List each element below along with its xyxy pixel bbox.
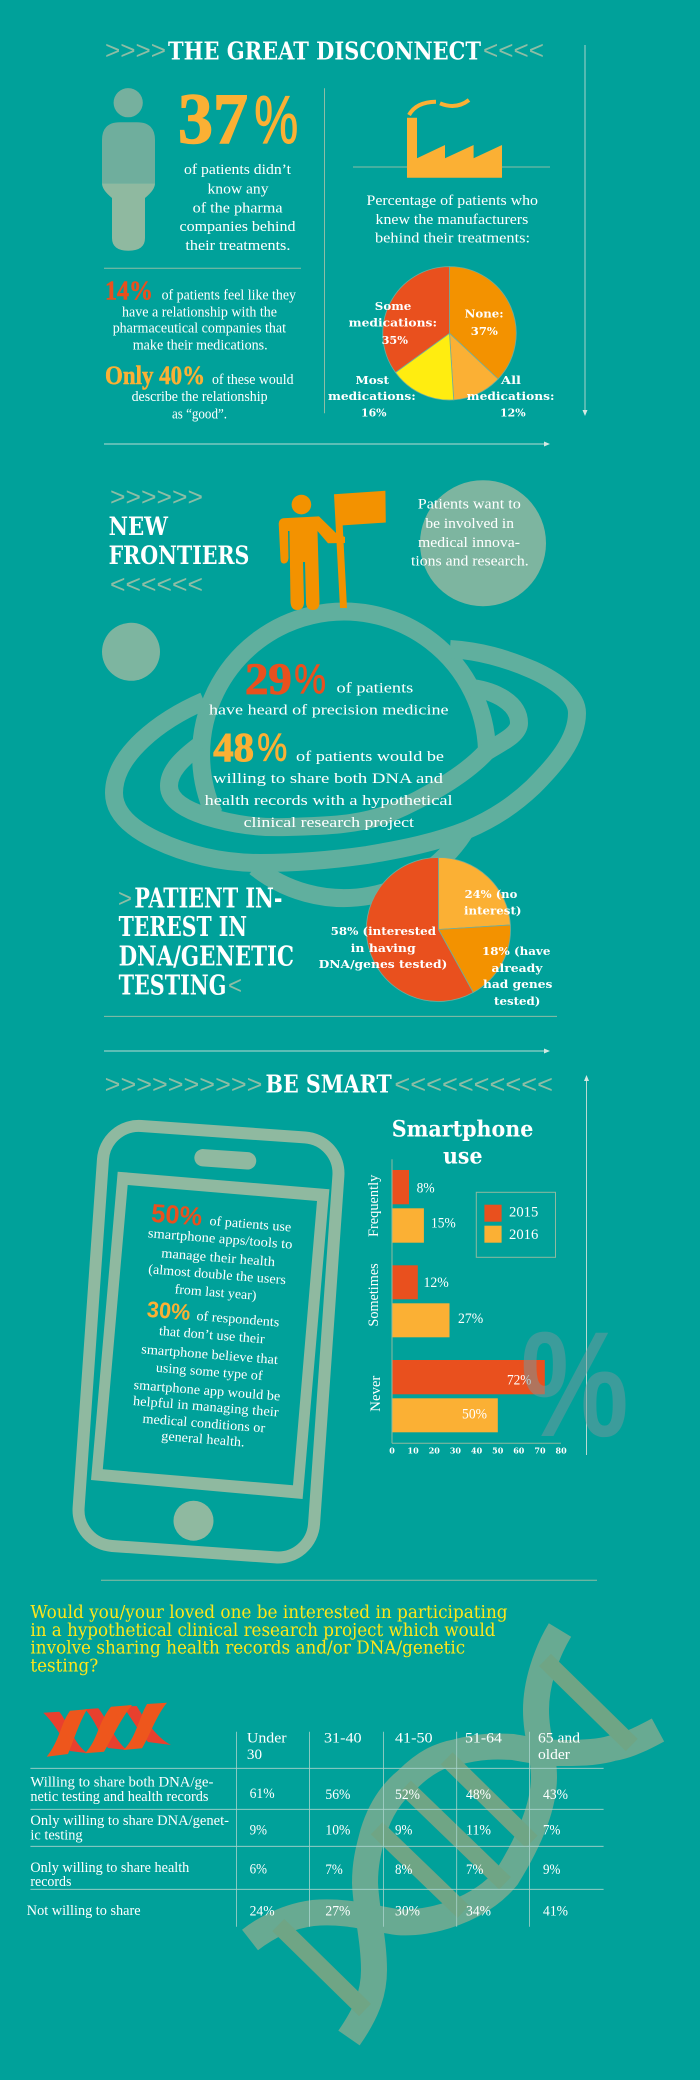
bar chart: smartphone use: 8% [417,1181,435,1197]
heading: patient interest: TESTING [119,970,226,1001]
icon: smartphone [76,1123,341,1560]
icon: small moon [102,623,160,681]
pie labels: 35% [382,333,408,347]
pie labels: DNA/genes tested) [319,957,447,971]
data table: Not willing to share [27,1903,141,1919]
text: phone screen stats: general health. [161,1428,245,1450]
question heading: testing? [30,1657,98,1677]
pie labels: medications: [467,389,554,403]
data table: 43% [543,1787,568,1803]
title: the great disconnect: THE GREAT DISCONNECT [168,36,481,65]
heading: new frontiers: <<<<<< [110,569,203,599]
heading: new frontiers [109,482,249,599]
text: phone screen stats: from last year) [174,1281,257,1303]
heading: new frontiers: FRONTIERS [109,541,249,570]
text: phone screen stats [132,1198,293,1450]
heading: new frontiers: >>>>>> [110,482,203,512]
chart title [392,1117,533,1170]
icon: red dna logo [43,1703,171,1757]
pie labels: 37% [471,324,498,338]
data table: 9% [250,1823,267,1839]
text: 37% description [180,162,296,254]
text: phone screen stats: smartphone app would be [133,1377,281,1404]
text: callout: be involved in [425,516,515,532]
heading: new frontiers: NEW [109,512,169,541]
stat text: 14%: pharmaceutical companies that [113,321,287,337]
text: 37% description: of the pharma [193,200,283,216]
data table: 9% [543,1862,560,1878]
text: phone screen stats: (almost double the users [148,1261,287,1287]
text: 37% description: companies behind [180,219,296,235]
stat text: only 40%: of these would [212,372,294,388]
pie labels: medications: [349,316,437,330]
stat text: only 40% [105,361,294,422]
arrow: horizontal right [104,442,550,446]
heading: patient interest: TEREST IN [119,912,247,943]
text: pie heading: behind their treatments: [375,231,530,247]
panel: clinical research table [27,1580,658,2038]
data table: 7% [466,1862,483,1878]
bar chart: smartphone use: 27% [458,1311,483,1327]
text: phone screen stats: of patients use [209,1213,292,1234]
data table: 7% [543,1823,560,1839]
bar chart: smartphone use: 50% [462,1407,487,1423]
stat text: only 40%: Only 40% [105,361,205,390]
stat text: 48%: % [257,727,287,770]
bar chart: smartphone use: 30 [450,1446,461,1456]
data table: older [538,1747,570,1763]
legend: 2015 [509,1205,538,1221]
icon: ringed planet [114,612,577,898]
text: phone screen stats: that don’t use their [158,1323,266,1346]
chart title: use [443,1144,482,1170]
bar chart: smartphone use: 60 [513,1446,525,1456]
data table: 30% [395,1904,420,1920]
stat text: 14%: have a relationship with the [122,305,277,321]
data table: Willing to share both DNA/ge- [30,1775,214,1791]
stat text: 14% [105,275,296,353]
pie labels [319,887,552,1008]
data table: netic testing and health records [30,1789,209,1805]
data table: 51-64 [465,1731,503,1747]
heading: patient interest [118,883,294,1001]
stat: 37%: 37 [178,79,248,159]
data table: 9% [395,1823,412,1839]
data table: 6% [250,1862,267,1878]
pie labels: 18% (have [482,944,550,958]
heading: patient interest: > [118,883,132,913]
heading: patient interest: PATIENT IN- [134,884,282,914]
pie labels: Some [375,299,411,313]
bar chart: smartphone use: 80 [556,1446,567,1456]
text: callout: Patients want to [418,497,521,513]
pie labels: tested) [494,994,540,1008]
text: callout: medical innova- [418,535,520,551]
chart title: Smartphone [392,1117,533,1143]
stat text: 48% [205,724,453,831]
icon: circle callout [420,480,546,606]
title: be smart: >>>>>>>>>> [105,1069,262,1099]
pie labels: All [500,373,522,387]
question heading: involve sharing health records and/or DNA/genetic [30,1638,465,1658]
bar chart: smartphone use: 70 [534,1446,546,1456]
stat text: 14%: of patients feel like they [162,287,296,303]
text: phone screen stats: smartphone believe that [141,1341,279,1367]
pie labels: 12% [500,406,526,420]
icon: factory [353,100,550,178]
bar chart: smartphone use: Sometimes [366,1263,382,1327]
panel: new frontiers [102,480,577,1054]
text: callout [411,497,529,570]
bar chart: smartphone use: 10 [408,1446,419,1456]
data table: 61% [250,1786,275,1802]
pie labels: Most [356,373,390,387]
stat text: 29% [209,654,449,719]
stat text: 48%: willing to share both DNA and [213,771,444,787]
data table: 41% [543,1904,568,1920]
text: phone screen stats: of respondents [196,1308,280,1330]
heading: patient interest: < [228,970,242,1000]
bar chart: smartphone use: 20 [429,1446,440,1456]
bar chart: smartphone use [366,1159,567,1456]
text: phone screen stats: smartphone apps/tools to [147,1225,293,1252]
data table: Only willing to share DNA/genet- [30,1813,229,1829]
text: 37% description: their treatments. [185,238,290,254]
pie labels: medications: [328,389,416,403]
data table [27,1731,604,1927]
text: pie heading [366,193,538,247]
stat text: only 40%: as “good”. [172,406,227,422]
stat text: 48%: clinical research project [244,815,415,831]
bar chart: smartphone use: 50 [492,1446,504,1456]
arrow: vertical up [584,1075,589,1455]
stat: 37% [178,79,298,159]
text: phone screen stats: 50% [150,1198,203,1232]
data table: 7% [325,1862,343,1878]
bar chart: smartphone use: Never [368,1376,384,1412]
text: pie heading: Percentage of patients who [366,193,538,209]
bar chart: smartphone use: 72% [507,1373,531,1389]
data table: Only willing to share health [30,1860,190,1876]
icon: large dna helix [250,1630,658,2038]
stat text: 48%: of patients would be [296,749,444,765]
title: the great disconnect: <<<< [483,35,544,65]
stat text: 14%: make their medications. [133,337,268,353]
bar chart: smartphone use: 12% [424,1275,449,1291]
text: 37% description: of patients didn’t [184,162,292,178]
pie labels: had genes [483,977,552,991]
data table: 10% [325,1823,350,1839]
stat text: 29%: have heard of precision medicine [209,703,449,719]
pie labels [328,299,554,420]
question heading: in a hypothetical clinical research project which would [30,1621,496,1641]
stat text: 29%: % [294,655,326,702]
stat text: 29%: of patients [336,680,413,696]
pie chart: manufacturers known [383,267,516,400]
text: phone screen stats: 30% [146,1297,191,1325]
pie labels: interest) [464,904,522,918]
pie labels: None: [465,307,504,321]
bar chart: smartphone use: 0 [389,1446,395,1456]
pie labels: in having [351,941,416,955]
data table: 56% [325,1787,350,1803]
stat text: only 40%: describe the relationship [132,389,268,405]
text: phone screen stats: medical conditions or [142,1411,266,1435]
pie chart: genetic testing interest [366,857,511,1001]
title: be smart: <<<<<<<<<< [394,1069,553,1099]
data table: 27% [325,1904,350,1920]
question heading [30,1603,508,1677]
data table: 34% [466,1904,491,1920]
title: be smart: BE SMART [266,1069,392,1098]
stat text: 48%: 48 [213,724,254,770]
bar chart: smartphone use: 40 [471,1446,483,1456]
data table: 24% [250,1904,275,1920]
bar chart: smartphone use: 15% [431,1216,456,1232]
stat text: 48%: health records with a hypothetical [205,793,453,809]
stat text: 29%: 29 [245,654,292,703]
text: phone screen stats: manage their health [161,1245,276,1269]
stat: 37%: % [254,82,298,158]
data table: 31-40 [324,1731,362,1747]
data table: 11% [466,1823,491,1839]
text: pie heading: knew the manufacturers [376,212,528,228]
question heading: Would you/your loved one be interested in participating [30,1603,508,1623]
data table: 48% [466,1787,491,1803]
icon: man with flag [279,491,386,610]
arrow: vertical down [582,45,588,416]
data table: 30 [247,1747,262,1763]
title: the great disconnect: >>>> [105,35,166,65]
text: 37% description: know any [208,181,269,197]
title: be smart [105,1069,553,1099]
text: callout: tions and research. [411,554,529,570]
decorative percent sign: % [521,1300,629,1468]
arrow: horizontal right [104,1048,550,1054]
icon: person [102,88,155,251]
data table: 41-50 [395,1731,433,1747]
data table: records [30,1874,72,1890]
panel: the great disconnect [102,35,588,446]
data table: 65 and [538,1731,581,1747]
data table: Under [247,1731,287,1747]
heading: patient interest: DNA/GENETIC [119,941,294,972]
stat text: 14%: 14% [105,275,153,305]
pie labels: 24% (no [465,887,518,901]
pie labels: 58% (interested [331,924,436,938]
pie labels: 16% [361,406,387,420]
text: phone screen stats: using some type of [155,1360,264,1383]
bar chart: smartphone use: Frequently [366,1174,382,1237]
text: phone screen stats: helpful in managing their [132,1393,280,1419]
legend: 2016 [509,1227,538,1243]
data table: 8% [395,1862,412,1878]
panel: be smart [76,1069,629,1560]
pie labels: already [492,961,543,975]
legend [476,1192,556,1257]
data table: 52% [395,1787,420,1803]
data table: ic testing [30,1827,83,1843]
